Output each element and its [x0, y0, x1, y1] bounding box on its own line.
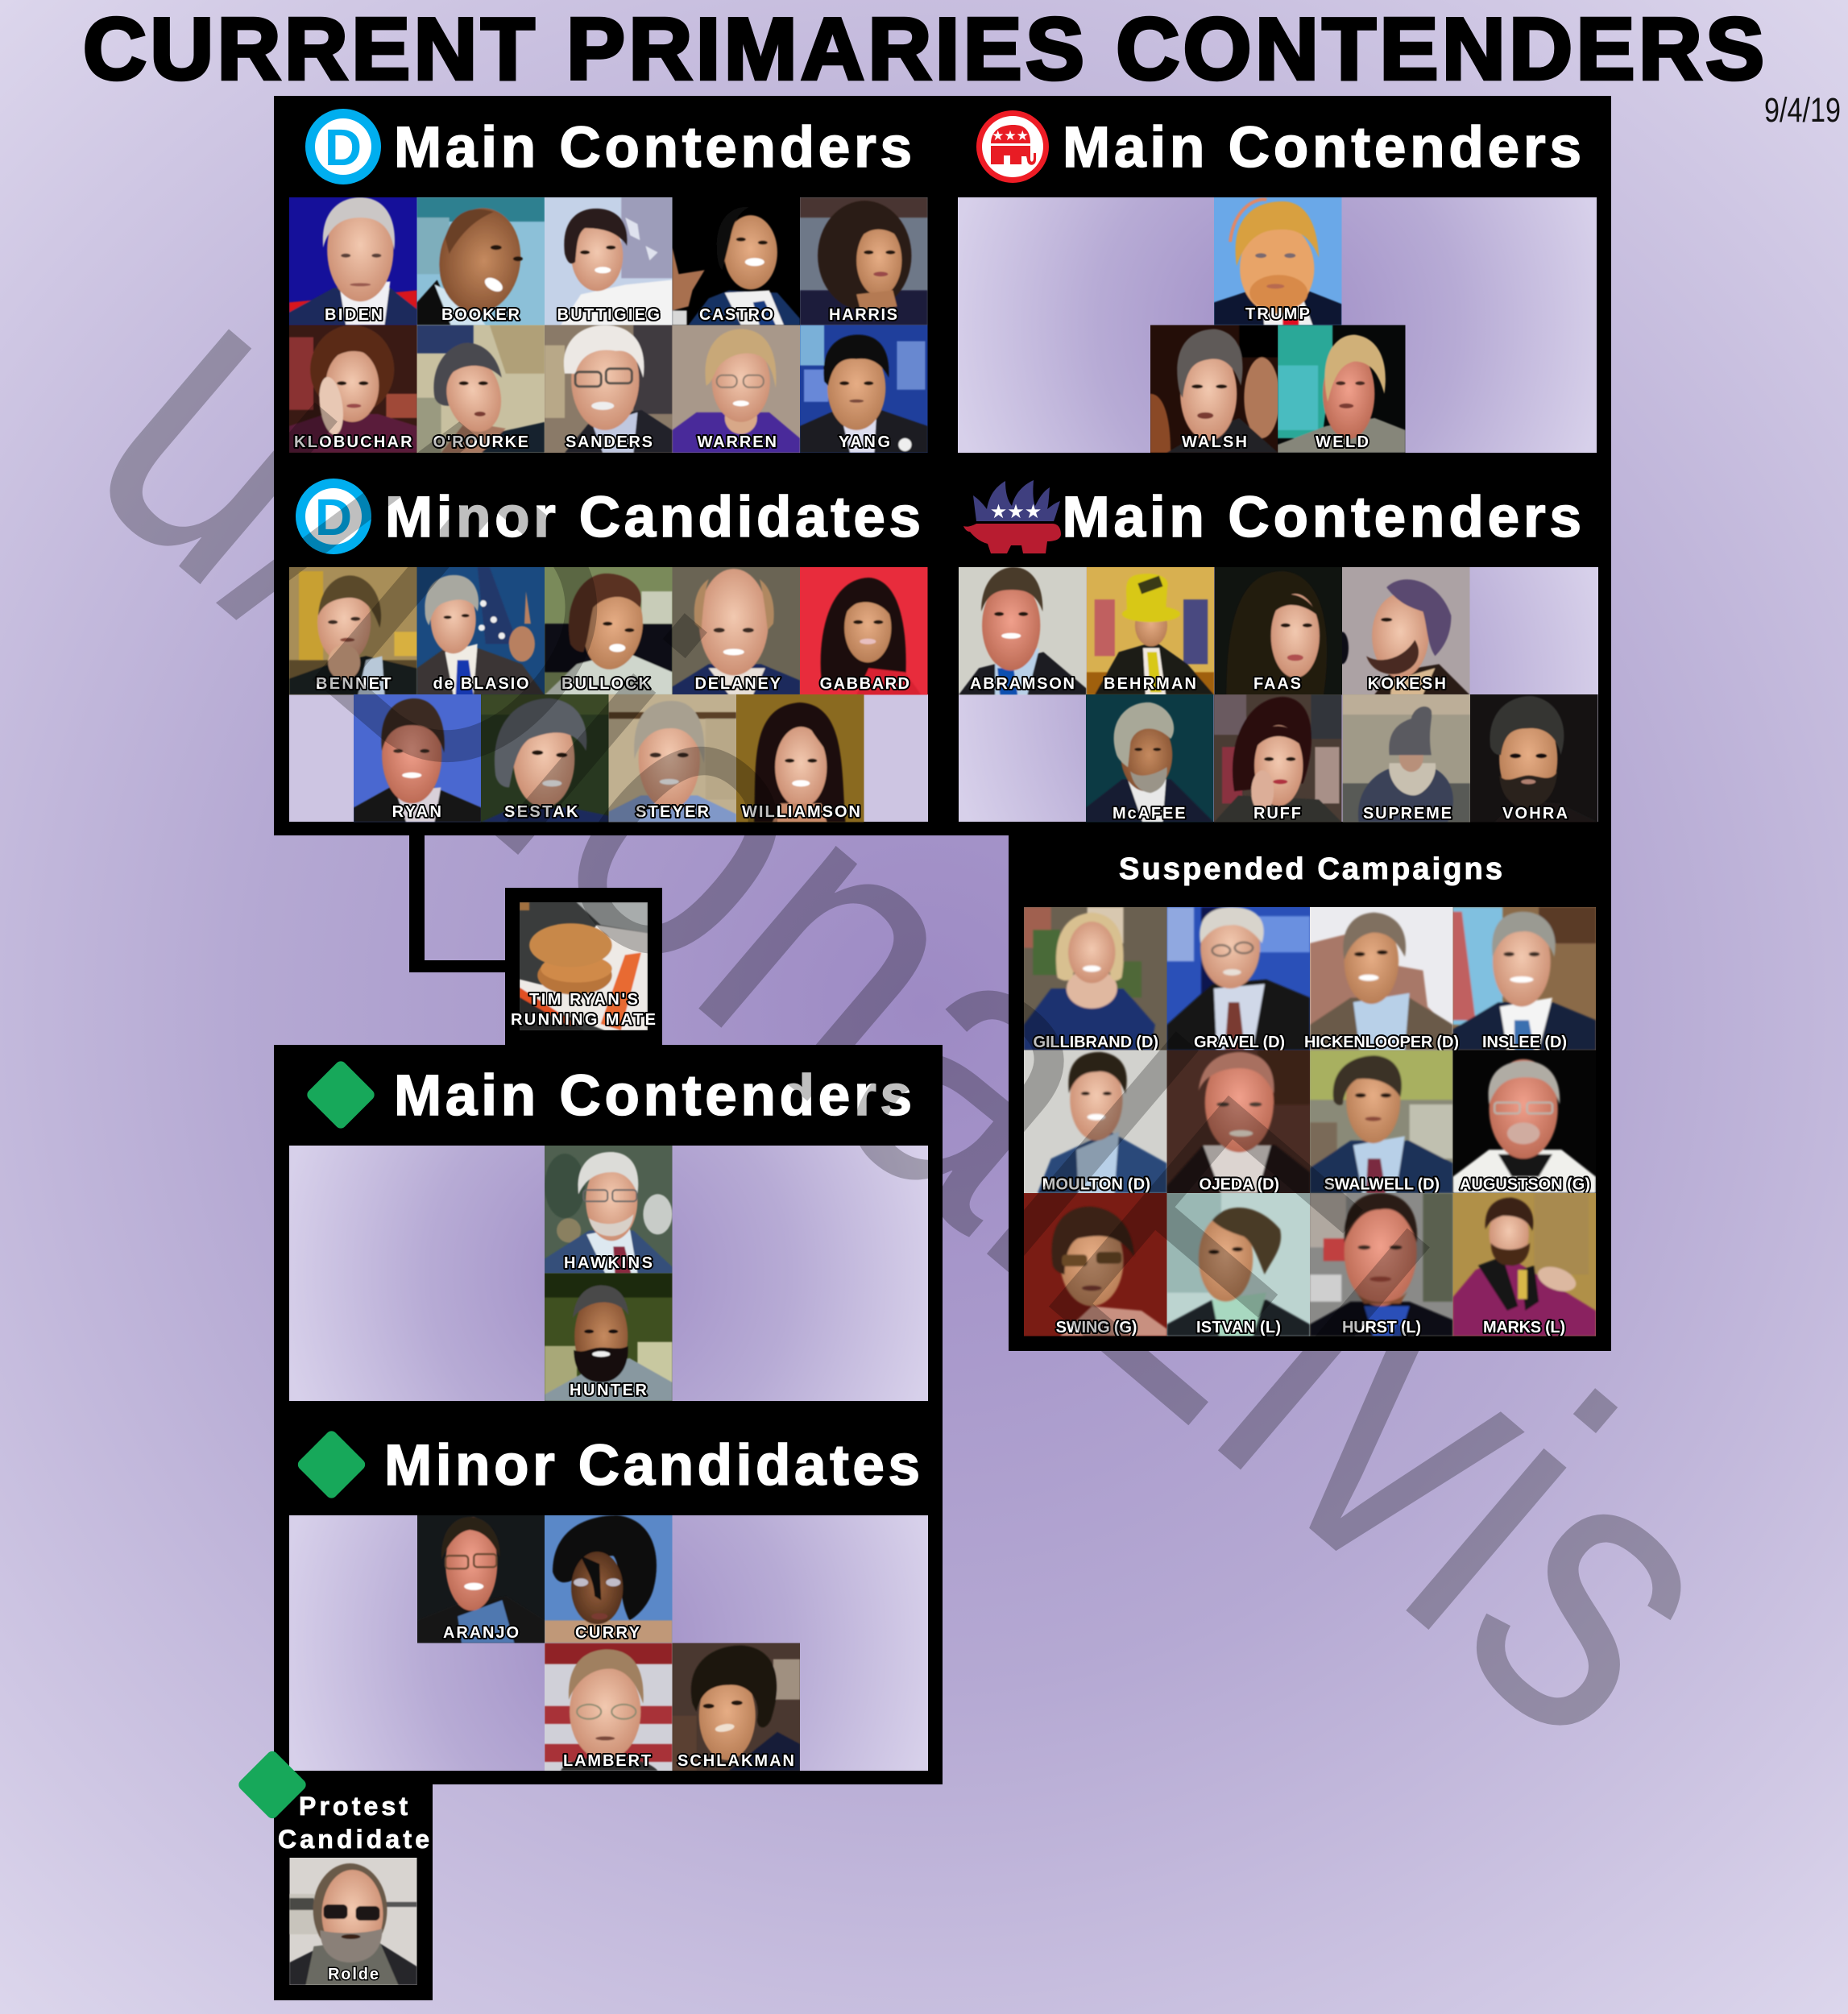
tile: Rolde: [290, 1858, 417, 1985]
panel: Libertarian main contenders: [943, 466, 1611, 835]
tile: Gillibrand: [1024, 907, 1166, 1051]
tile: Curry: CURRY: [575, 1624, 640, 1642]
tile: Lambert: [545, 1643, 672, 1771]
tile: Supreme: [1342, 694, 1470, 823]
tile: Ryan: RYAN: [392, 803, 441, 821]
panel: Democratic main contenders: [274, 96, 943, 466]
tile: Sanders: [545, 325, 672, 453]
icon: Republican elephant logo: [976, 110, 1049, 183]
icon: Democratic D logo: D: [315, 488, 352, 546]
tile: Warren: [672, 325, 800, 453]
tile: Augustson: [1453, 1051, 1596, 1194]
panel: suspended campaigns: [1009, 835, 1611, 1351]
heading: Main Contenders: Main Contenders: [1062, 486, 1581, 549]
tile: Hunter: HUNTER: [570, 1382, 648, 1399]
tile: Delaney: [672, 567, 800, 694]
candidate grid background: [289, 1515, 928, 1771]
tile: Vohra: VOHRA: [1502, 805, 1568, 823]
tile: Aranjo: [417, 1515, 545, 1643]
tile: Ryan: [354, 694, 482, 822]
heading: Main Contenders: Main Contenders: [394, 1064, 912, 1128]
tile: Supreme: SUPREME: [1363, 805, 1452, 823]
tile: Swalwell: SWALWELL (D): [1324, 1176, 1440, 1194]
tile: Buttigieg: [545, 197, 672, 325]
tile: Walsh: WALSH: [1182, 433, 1247, 451]
tile: Delaney: DELANEY: [694, 675, 781, 693]
tile: Ojeda: [1166, 1051, 1310, 1194]
tile: Yang: [800, 325, 928, 453]
panel: running mate: [505, 888, 662, 1045]
tile: Marks: MARKS (L): [1483, 1319, 1565, 1336]
candidate grid background: [958, 197, 1597, 453]
label: Tim Ryan's running mate: TIM RYAN'S: [529, 991, 638, 1009]
tile: Gravel: [1166, 907, 1310, 1051]
tile: Warren: WARREN: [698, 433, 777, 451]
tile: Curry: [545, 1515, 672, 1643]
tile: Hurst: [1310, 1193, 1453, 1336]
tile: Bullock: [545, 567, 672, 694]
tile: Bennet: [289, 567, 417, 694]
tile: Bennet: BENNET: [316, 675, 392, 693]
tile: Klobuchar: [289, 325, 417, 453]
panel: Democratic minor candidates: [274, 466, 943, 835]
tile: Lambert: LAMBERT: [563, 1752, 651, 1770]
tile: Weld: [1278, 325, 1405, 453]
tile: Ojeda: OJEDA (D): [1199, 1176, 1279, 1194]
tile: Swalwell: [1310, 1051, 1453, 1194]
icon: Republican elephant logo: ★★★: [992, 128, 1029, 144]
tile: Swing: SWING (G): [1056, 1319, 1137, 1336]
tile: Yang: YANG: [839, 433, 890, 451]
tile: Booker: BOOKER: [441, 306, 520, 324]
tile: Augustson: AUGUSTSON (G): [1460, 1176, 1590, 1194]
tile: Hunter: [545, 1273, 672, 1401]
icon: Green diamond: [296, 1428, 367, 1501]
heading: Suspended Campaigns: Suspended Campaigns: [1119, 852, 1502, 886]
label: Tim Ryan's running mate: RUNNING MATE: [511, 1011, 656, 1029]
heading: Protest Candidate: Candidate: [278, 1825, 429, 1854]
tile: Hawkins: [545, 1146, 672, 1273]
icon: Libertarian porcupine logo: [963, 480, 1061, 553]
tile: Ruff: [1214, 694, 1342, 823]
tile: Castro: [672, 197, 800, 325]
icon: Democratic D logo: [305, 109, 381, 184]
tile: Hawkins: HAWKINS: [564, 1254, 653, 1272]
tile: Gravel: GRAVEL (D): [1194, 1034, 1285, 1051]
tile: Biden: BIDEN: [325, 306, 383, 324]
tile: Abramson: ABRAMSON: [970, 675, 1075, 693]
icon: Green diamond: [236, 1749, 309, 1821]
tile: Trump: [1214, 197, 1342, 325]
panel: protest candidate: [236, 1749, 433, 2000]
tile: Gabbard: [800, 567, 928, 694]
tile: Kokesh: KOKESH: [1368, 675, 1446, 693]
tile: Klobuchar: KLOBUCHAR: [294, 433, 412, 451]
tile: O'Rourke: [417, 325, 545, 453]
tile: Sanders: SANDERS: [566, 433, 653, 451]
tile: Marks: [1453, 1193, 1596, 1336]
tile: de Blasio: de BLASIO: [433, 675, 528, 693]
candidate grid background: [289, 1146, 928, 1401]
tile: Walsh: [1150, 325, 1280, 453]
label: Tim Ryan's running mate: [511, 991, 656, 1029]
tile: Vohra: [1470, 694, 1598, 823]
icon: Libertarian porcupine logo: ★★★: [990, 500, 1042, 523]
tile: Inslee: INSLEE (D): [1482, 1034, 1567, 1051]
tile: Gabbard: GABBARD: [820, 675, 909, 693]
icon: Democratic D logo: [296, 479, 371, 554]
tile: Istvan: [1166, 1193, 1310, 1336]
tile: O'Rourke: O'ROURKE: [433, 433, 528, 451]
tile: Swing: [1024, 1193, 1166, 1336]
tile: Hickenlooper: HICKENLOOPER (D): [1304, 1034, 1459, 1051]
watermark: u/DionalElvis: [19, 199, 1813, 1821]
tile: Sestak: SESTAK: [504, 803, 578, 821]
tile: de Blasio: [417, 567, 545, 694]
tile: Abramson: [959, 567, 1086, 694]
tile: Harris: [800, 197, 928, 325]
tile: McAfee: McAFEE: [1113, 805, 1186, 823]
tile: Istvan: ISTVAN (L): [1196, 1319, 1281, 1336]
tile: Biden: [289, 197, 417, 325]
tile: Booker: [417, 197, 545, 325]
candidate grid background: [959, 567, 1598, 822]
heading: Minor Candidates: Minor Candidates: [384, 1434, 920, 1498]
candidate grid background: [289, 694, 928, 822]
tile: Steyer: [609, 694, 736, 822]
tile: Behrman: BEHRMAN: [1104, 675, 1196, 693]
connector: Ryan to running mate: [409, 835, 516, 972]
icon: Democratic D logo: D: [325, 118, 362, 176]
tile: Harris: HARRIS: [829, 306, 897, 324]
heading: Minor Candidates: Minor Candidates: [385, 486, 921, 549]
tile: Faas: FAAS: [1253, 675, 1301, 693]
tile: Popeyes sandwich: [520, 902, 648, 1030]
tile: Schlakman: SCHLAKMAN: [677, 1752, 794, 1770]
tile: Rolde: Rolde: [328, 1966, 379, 1983]
panel: Republican main contenders: [943, 96, 1611, 466]
tile: Steyer: STEYER: [636, 803, 710, 821]
tile: Williamson: WILLIAMSON: [742, 803, 860, 821]
heading: Main Contenders: Main Contenders: [394, 116, 912, 180]
panel: Green minor candidates: [274, 1415, 943, 1784]
title: CURRENT PRIMARIES CONTENDERS: [83, 0, 1764, 98]
tile: Buttigieg: BUTTIGIEG: [557, 306, 660, 324]
tile: Williamson: [736, 694, 864, 822]
tile: Moulton: MOULTON (D): [1042, 1176, 1150, 1194]
tile: Weld: WELD: [1316, 433, 1369, 451]
tile: Faas: [1215, 567, 1342, 694]
panel: Green main contenders: [274, 1045, 943, 1415]
heading: Protest Candidate: Protest: [299, 1792, 408, 1821]
icon: Green diamond: [305, 1059, 377, 1131]
tile: Hickenlooper: [1304, 907, 1459, 1051]
tile: McAfee: [1086, 694, 1213, 823]
tile: Moulton: [1024, 1051, 1166, 1194]
tile: Inslee: [1453, 907, 1596, 1051]
tile: Schlakman: [672, 1643, 800, 1771]
tile: Bullock: BULLOCK: [561, 675, 651, 693]
tile: Hurst: HURST (L): [1342, 1319, 1421, 1336]
heading: Main Contenders: Main Contenders: [1063, 116, 1581, 180]
heading: Protest Candidate: [278, 1792, 429, 1854]
tile: Sestak: [481, 694, 609, 822]
tile: Trump: TRUMP: [1245, 305, 1310, 323]
tile: Castro: CASTRO: [699, 306, 773, 324]
tile: Kokesh: [1336, 567, 1469, 694]
tile: Aranjo: ARANJO: [443, 1624, 519, 1642]
tile: Gillibrand: GILLIBRAND (D): [1033, 1034, 1158, 1051]
tile: Behrman: [1087, 567, 1214, 694]
tile: Ruff: RUFF: [1253, 805, 1301, 823]
